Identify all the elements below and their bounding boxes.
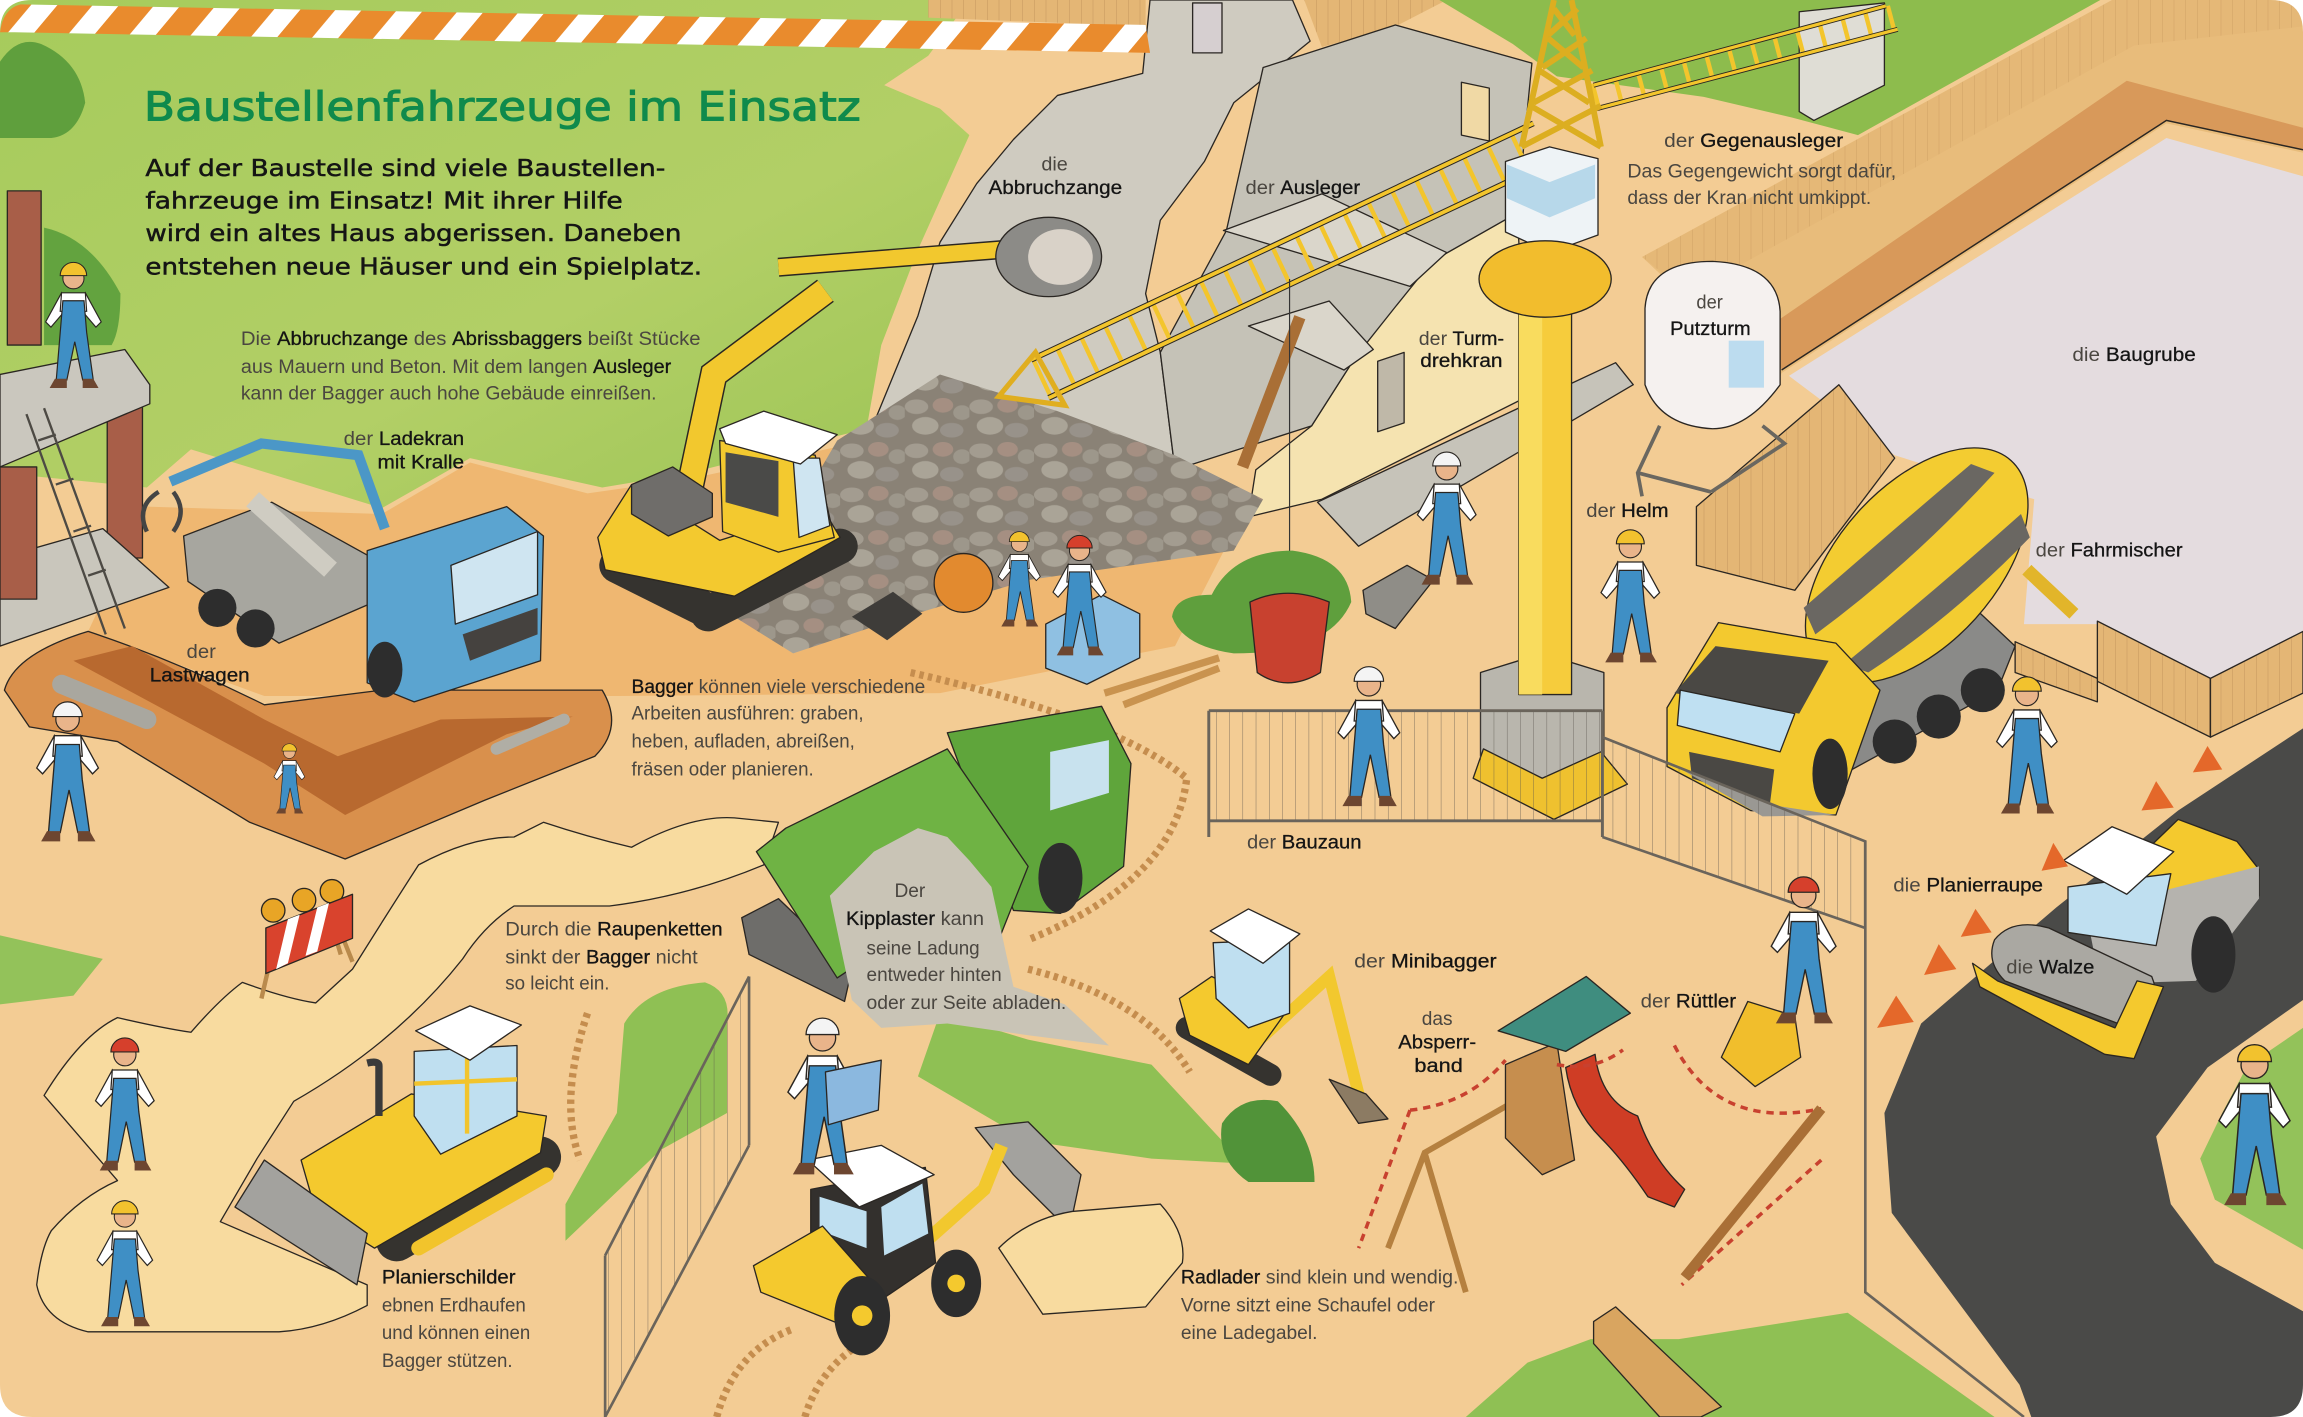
label: Baugrube: die Baugrube <box>2072 344 2196 366</box>
red bucket <box>1250 593 1329 683</box>
claw <box>143 492 181 532</box>
text: excavators: heben, aufladen, abreißen, <box>632 730 855 752</box>
rear wheels <box>198 589 236 627</box>
silo <box>1638 261 1785 496</box>
body <box>598 485 840 596</box>
label: Putzturm: Putzturm <box>1670 318 1751 340</box>
meadow: top left <box>0 0 969 508</box>
text: demolition pincer <box>241 328 701 404</box>
bush: behind worker <box>44 228 120 345</box>
seesaw <box>1685 1109 1821 1278</box>
worker: with wheelbarrow <box>1417 452 1476 585</box>
pipe left <box>62 684 147 720</box>
fence: back <box>1209 711 1602 837</box>
label: Helm: der Helm <box>1586 500 1669 522</box>
blueprint <box>825 1060 881 1125</box>
label: Turmdrehkran <box>1419 328 1504 372</box>
label: Turmdrehkran: der Turm- <box>1419 328 1504 350</box>
loader crane arm <box>170 443 385 529</box>
roof <box>1210 909 1300 963</box>
label: Abbruchzange: die <box>1041 153 1068 175</box>
label: Abbruchzange: Abbruchzange <box>988 177 1122 199</box>
text: excavators: fräsen oder planieren. <box>632 758 814 780</box>
slide <box>1566 1054 1685 1207</box>
foundation <box>1317 363 1633 546</box>
label: Ladekran: mit Kralle <box>377 451 464 473</box>
road roller <box>1973 819 2259 1059</box>
intro text: entstehen neue Häuser und ein Spielplatz. <box>145 253 702 281</box>
dump body <box>756 749 1028 978</box>
text: dozer blades <box>382 1266 530 1372</box>
arm <box>778 250 1002 267</box>
mixer truck <box>1667 408 2074 816</box>
blue truck with crane <box>143 443 543 702</box>
pipe right <box>496 720 564 749</box>
label: Absperrband: Absperr- <box>1398 1031 1476 1053</box>
ground tracks <box>571 673 1190 1417</box>
windshield <box>451 532 538 624</box>
crane jib left <box>999 123 1551 405</box>
track side <box>419 1175 546 1248</box>
text: wheel loaders: eine Ladegabel. <box>1181 1322 1317 1344</box>
bushes by bucket <box>1172 551 1351 653</box>
text: demolition pincer: kann der Bagger auch hohe Gebäude einreißen. <box>241 382 657 404</box>
text: demolition pincer: aus Mauern und Beton. Mit dem langen Ausleger <box>241 356 672 378</box>
trench <box>4 631 612 859</box>
lower grey body <box>2086 866 2259 984</box>
tower <box>1505 1043 1574 1175</box>
green patch right of road <box>2200 1028 2303 1250</box>
text: dump truck: oder zur Seite abladen. <box>867 992 1066 1014</box>
label: Abbruchzange <box>988 153 1122 199</box>
leaning wood beam <box>1243 317 1300 467</box>
windshield <box>1677 690 1795 752</box>
label: Bauzaun: der Bauzaun <box>1247 832 1362 854</box>
text: dozer blades: und können einen <box>382 1322 530 1344</box>
cab <box>1667 623 1880 815</box>
bushes lower <box>1221 1100 1315 1182</box>
text: dump truck: entweder hinten <box>867 964 1002 986</box>
worker: sitting <box>1053 535 1106 655</box>
body <box>301 1094 546 1248</box>
tub <box>852 592 922 640</box>
sand hills <box>37 818 778 1332</box>
counterweight <box>1799 3 1884 120</box>
label: Rüttler: der Rüttler <box>1641 990 1736 1012</box>
worker: with shovel <box>2219 1045 2290 1205</box>
playground <box>1359 976 1821 1292</box>
fence boards right of pit <box>2015 621 2303 737</box>
floor slab upper <box>1223 194 1447 286</box>
text: wheel loaders <box>1181 1266 1458 1344</box>
text: counterweight <box>1627 161 1896 209</box>
worker: on building <box>46 262 101 388</box>
text: dozer blades: Planierschilder <box>382 1266 516 1288</box>
cab window <box>1050 740 1109 811</box>
grille <box>1689 752 1774 805</box>
arm <box>1248 976 1359 1094</box>
wooden pit walls <box>1642 0 2303 385</box>
ruined house <box>874 0 1633 546</box>
cab <box>2068 874 2171 946</box>
worker: at mixer <box>998 532 1040 626</box>
roof <box>808 1145 934 1207</box>
green patch middle <box>918 1013 1307 1182</box>
worker: carrying bag <box>1601 530 1660 662</box>
swing frame <box>1388 1094 1528 1292</box>
text: excavators: Bagger können viele verschiedene <box>632 676 925 698</box>
text: dozer blades: Bagger stützen. <box>382 1350 513 1372</box>
title: Baustellenfahrzeuge im Einsatz <box>144 84 861 130</box>
text: crawler tracks: so leicht ein. <box>505 973 610 995</box>
pipes in bed <box>253 499 330 570</box>
pallet with blue blocks <box>1046 595 1140 684</box>
worker: with buckets <box>97 1201 153 1326</box>
label: Absperrband: das <box>1422 1008 1453 1030</box>
worker: digging <box>96 1038 154 1170</box>
wood fence: top behind ruin <box>1304 0 1447 47</box>
label: Ausleger: der Ausleger <box>1246 177 1360 199</box>
engine block <box>632 467 712 536</box>
roof <box>416 1006 521 1060</box>
ladder <box>26 408 125 634</box>
intro text: Auf der Baustelle sind viele Baustellen- <box>145 154 665 182</box>
text: excavators <box>632 676 925 780</box>
text: counterweight: Das Gegengewicht sorgt dafür, <box>1627 161 1896 183</box>
text blob <box>830 828 1109 1045</box>
exhaust <box>367 1062 379 1116</box>
text: dump truck: Kipplaster kann <box>846 908 984 930</box>
crane yellow foot <box>1473 749 1627 819</box>
text: excavators: Arbeiten ausführen: graben, <box>632 703 864 725</box>
floor slab lower <box>1248 301 1373 370</box>
tracks <box>1187 1028 1270 1075</box>
label: Absperrband <box>1398 1008 1476 1077</box>
wheel <box>1038 843 1082 913</box>
barrier tape <box>1359 1045 1821 1285</box>
roof <box>2064 827 2174 894</box>
roof <box>720 411 837 464</box>
text: crawler tracks: Durch die Raupenketten <box>505 918 723 940</box>
label: Ladekran <box>344 428 464 473</box>
label: Putzturm: der <box>1696 291 1723 313</box>
intro text: wird ein altes Haus abgerissen. Daneben <box>145 219 682 247</box>
wood planks <box>1594 1307 1721 1417</box>
body <box>753 1226 881 1329</box>
rubble pile <box>734 374 1263 653</box>
cab <box>947 706 1131 913</box>
meadow: top right behind crane <box>1439 0 2100 135</box>
bumper <box>1671 764 1836 816</box>
cab frame <box>414 1048 517 1134</box>
cab <box>811 1167 936 1310</box>
front wheel <box>1812 739 1848 809</box>
barrier <box>261 880 352 999</box>
left concrete building <box>0 191 169 646</box>
wheel <box>2191 916 2235 993</box>
fence: front left <box>605 976 749 1417</box>
yellow excavator <box>598 217 1102 614</box>
tracks <box>617 546 840 614</box>
windows <box>1461 82 1489 141</box>
cab glass <box>1213 940 1290 1028</box>
intro text <box>145 154 702 281</box>
text: crawler tracks <box>505 918 723 995</box>
cab <box>367 507 543 702</box>
cab <box>414 1045 517 1154</box>
label: Turmdrehkran: drehkran <box>1420 350 1503 372</box>
blade <box>235 1160 367 1285</box>
drum <box>1763 408 2070 723</box>
text: dozer blades: ebnen Erdhaufen <box>382 1294 526 1316</box>
traffic cones <box>1877 746 2222 1028</box>
demolition pincer <box>996 217 1102 297</box>
discharge chute <box>2027 570 2074 614</box>
label: Gegenausleger: der Gegenausleger <box>1664 130 1844 152</box>
mini excavator <box>1179 909 1388 1123</box>
crane jib right <box>1594 6 1898 109</box>
road <box>1884 728 2303 1417</box>
cab window <box>793 458 830 537</box>
ground: orange dirt around excavator <box>88 441 1234 696</box>
cab grating <box>726 452 778 517</box>
fence: right diagonal <box>1602 737 2024 1417</box>
drum <box>1992 925 2156 1028</box>
bucket <box>975 1122 1081 1231</box>
label: Lastwagen: Lastwagen <box>150 664 250 686</box>
text: crawler tracks: sinkt der Bagger nicht <box>505 946 698 968</box>
dirt pile <box>999 1204 1183 1314</box>
text: wheel loaders: Radlader sind klein und wendig. <box>1181 1266 1458 1288</box>
worker: in trench <box>274 744 305 813</box>
drum stripes <box>1804 464 2030 673</box>
worker: near mixer truck <box>1997 677 2057 814</box>
crane concrete base <box>1480 653 1604 778</box>
cab <box>720 441 834 552</box>
label: Minibagger: der Minibagger <box>1354 951 1497 973</box>
excavation pit <box>1789 138 2303 690</box>
crane tower <box>1519 301 1572 695</box>
worker: compactor operator <box>1771 877 1836 1023</box>
intro text: fahrzeuge im Einsatz! Mit ihrer Hilfe <box>145 187 623 215</box>
crane hook rope <box>1289 279 1291 595</box>
plate compactor <box>1721 1001 1801 1087</box>
timber stack <box>1104 658 1219 705</box>
label: Planierraupe: die Planierraupe <box>1893 874 2043 896</box>
label: Walze: die Walze <box>2006 957 2094 979</box>
worker: with pickaxe <box>37 702 98 841</box>
cab black top <box>1674 646 1829 714</box>
text: dump truck: Der <box>894 880 926 902</box>
wheel loader <box>753 1122 1183 1355</box>
label: Lastwagen <box>150 641 250 686</box>
bush: top left <box>0 42 85 138</box>
text: dump truck: seine Ladung <box>867 937 980 959</box>
wood fence: top behind banner <box>928 0 1146 26</box>
crane <box>999 0 1898 819</box>
cement mixer <box>934 554 993 612</box>
windows <box>820 1184 928 1255</box>
wheels <box>834 1276 890 1355</box>
warning stripe banner <box>0 4 1150 53</box>
wheelbarrow <box>1363 565 1434 628</box>
frame <box>1973 963 2163 1059</box>
chassis <box>1836 602 2015 778</box>
dump bed <box>184 502 367 643</box>
worker: with blueprint <box>788 1018 857 1174</box>
green strip beside fence <box>565 982 728 1241</box>
text: demolition pincer: Die Abbruchzange des Abrissbaggers beißt Stücke <box>241 328 701 350</box>
label: Fahrmischer: der Fahrmischer <box>2036 540 2183 562</box>
label: Ladekran: der Ladekran <box>344 428 464 450</box>
boom <box>687 291 825 499</box>
text: wheel loaders: Vorne sitzt eine Schaufel oder <box>1181 1294 1435 1316</box>
rear body <box>2115 819 2259 978</box>
text: dump truck <box>846 880 1066 1014</box>
loader arm <box>918 1145 1002 1248</box>
roof <box>1498 976 1630 1051</box>
chassis <box>742 899 852 1001</box>
crane mast lattice <box>1522 0 1601 147</box>
worker: waving <box>1338 667 1400 806</box>
text: counterweight: dass der Kran nicht umkippt. <box>1627 187 1871 209</box>
bulldozer <box>235 1006 546 1285</box>
tracks <box>397 1157 540 1241</box>
green dump truck <box>742 706 1131 1045</box>
scoop <box>1329 1079 1388 1123</box>
body <box>1179 976 1285 1065</box>
crane cabin <box>1505 147 1598 253</box>
label: Lastwagen: der <box>187 641 216 663</box>
silo wood box <box>1696 385 1895 590</box>
green patch bottom <box>1466 1313 1995 1417</box>
green patch left <box>0 935 103 1004</box>
label: Absperrband: band <box>1414 1055 1463 1077</box>
label: Putzturm <box>1670 291 1751 340</box>
grille <box>463 608 538 661</box>
front wheel <box>367 642 402 697</box>
crane ring <box>1479 241 1611 317</box>
